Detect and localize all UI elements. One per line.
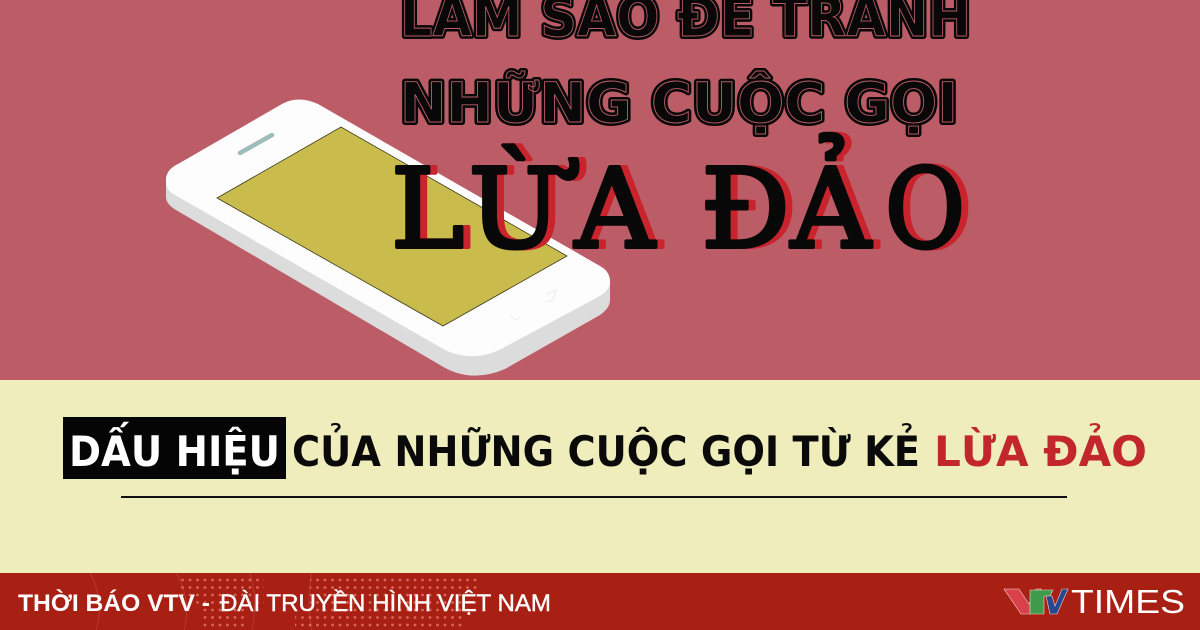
- subheading: [63, 417, 1147, 479]
- title: LỪA ĐẢO with red shadow: O: [885, 145, 965, 273]
- subheading underline: [121, 496, 1067, 498]
- footer bar: [0, 573, 1200, 630]
- footer arcs: [90, 573, 312, 630]
- footer text: regular part: ĐÀI TRUYỀN HÌNH VIỆT NAM: [220, 589, 551, 617]
- footer text: bold part: THỜI BÁO VTV -: [18, 589, 210, 617]
- phone buttons: [510, 290, 556, 320]
- highlight box: [63, 417, 286, 479]
- highlighted words: DẤU HIỆU: [69, 420, 280, 476]
- title: second line: NHỮNG CUỘC GỌI: [400, 71, 958, 135]
- panel: cream section background: [0, 380, 1200, 574]
- footer dotted map pattern: [178, 575, 478, 630]
- logo: VTV Times: [1004, 583, 1185, 620]
- title: LỪA ĐẢO with red shadow: LỪA ĐẢ: [391, 133, 872, 273]
- phone speaker: [240, 135, 272, 153]
- logo: VTV Times: TIMES: [1071, 583, 1185, 620]
- phone side: [166, 178, 610, 376]
- middle words: CỦA NHỮNG CUỘC GỌI TỪ KẺ: [292, 422, 920, 476]
- red words: LỪA ĐẢO: [934, 422, 1147, 476]
- title: second line: NHỮNG CUỘC GỌI: [400, 71, 958, 135]
- phone face: [166, 100, 610, 356]
- panel: top pink background: [0, 0, 1200, 381]
- title: LỪA ĐẢO with red shadow: LỪA ĐẢ: [398, 133, 879, 273]
- title: LỪA ĐẢO with red shadow: O: [892, 145, 972, 273]
- phone screen: [217, 127, 567, 326]
- icon: smartphone: [166, 100, 610, 376]
